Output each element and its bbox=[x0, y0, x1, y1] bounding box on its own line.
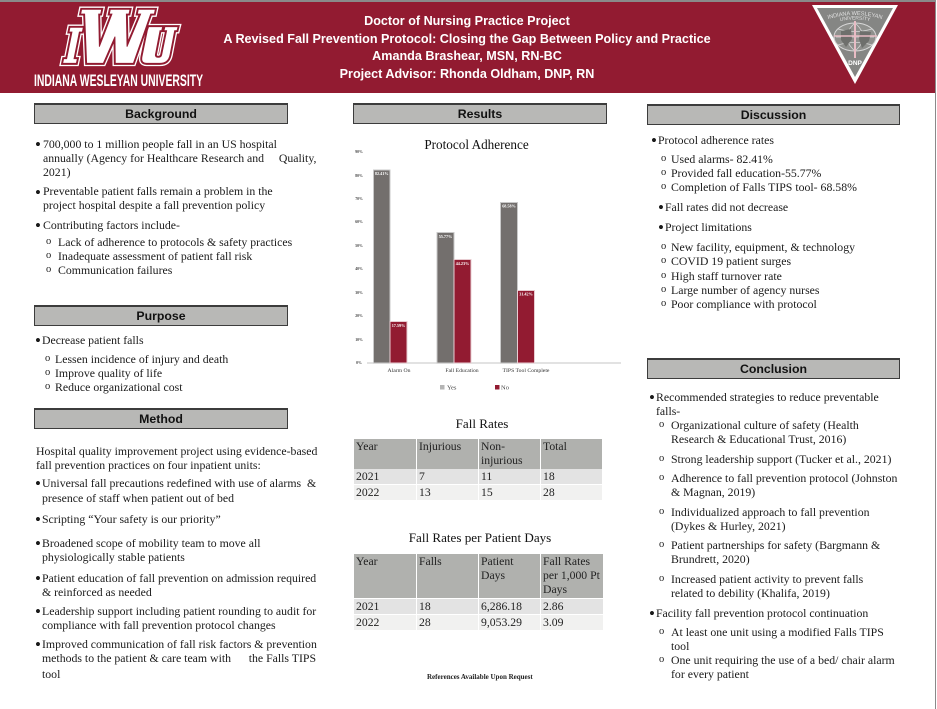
panel: discussion: Completion of Falls TIPS tool- 68.58% bbox=[671, 180, 857, 194]
panel: background: o bbox=[46, 264, 51, 275]
panel: conclusion: • bbox=[649, 604, 655, 623]
bar chart: protocol adherence: 82.41% bbox=[375, 171, 389, 176]
table: fall rates per patient days bbox=[354, 554, 603, 630]
table: fall rates: Total bbox=[543, 440, 567, 453]
panel: conclusion: (Dykes & Hurley, 2021) bbox=[671, 519, 786, 533]
heading: results: Results bbox=[458, 107, 502, 121]
heading: method bbox=[34, 408, 288, 429]
bar chart: protocol adherence bbox=[355, 137, 621, 392]
table: fall rates per patient days: Days bbox=[543, 583, 567, 596]
title: project heading: Project Advisor: Rhonda Oldham, DNP, RN bbox=[340, 67, 594, 81]
table: fall rates per patient days: 2021 bbox=[356, 600, 379, 613]
panel: discussion: • bbox=[658, 218, 664, 237]
heading: results bbox=[353, 103, 607, 124]
heading: conclusion: Conclusion bbox=[740, 362, 807, 376]
panel: discussion: Provided fall education-55.77% bbox=[671, 166, 821, 180]
panel: method: presence of staff when patient out of bed bbox=[42, 491, 234, 505]
bar chart: protocol adherence: 40% bbox=[355, 267, 363, 271]
bar chart: protocol adherence: 50% bbox=[355, 244, 363, 248]
bar chart: protocol adherence: 55.77% bbox=[439, 234, 452, 239]
panel: purpose: o bbox=[45, 367, 50, 378]
panel: discussion: Project limitations bbox=[665, 220, 752, 234]
panel: conclusion: & Magnan, 2019) bbox=[671, 485, 755, 499]
icon: DNP triangle seal bbox=[812, 5, 898, 84]
references note: References Available Upon Request bbox=[427, 673, 533, 681]
icon: IWU logo bbox=[34, 6, 203, 90]
heading: fall rates: Fall Rates bbox=[456, 416, 508, 431]
bar chart: protocol adherence: Yes bbox=[447, 384, 457, 392]
table: fall rates: Year bbox=[356, 440, 378, 453]
panel: method: tool bbox=[42, 667, 60, 681]
panel: discussion: High staff turnover rate bbox=[671, 269, 782, 283]
panel: conclusion: o bbox=[659, 573, 664, 584]
table: fall rates per patient days: Fall Rates bbox=[543, 555, 590, 568]
panel: discussion: Poor compliance with protocol bbox=[671, 297, 817, 311]
heading: purpose bbox=[34, 305, 288, 326]
panel: conclusion: • bbox=[649, 388, 655, 407]
panel: method: methods to the patient & care team with the Falls TIPS bbox=[42, 651, 316, 665]
panel: method: Hospital quality improvement project using evidence-based bbox=[36, 444, 317, 458]
panel: conclusion: Individualized approach to fall prevention bbox=[671, 505, 870, 519]
title: project heading: Doctor of Nursing Practice Project bbox=[364, 14, 570, 28]
panel: discussion bbox=[647, 104, 900, 311]
panel: background: Communication failures bbox=[58, 263, 172, 277]
bar chart: protocol adherence: TIPS Tool Complete bbox=[503, 368, 550, 374]
panel: conclusion: Increased patient activity to prevent falls bbox=[671, 572, 863, 586]
table: fall rates per patient days: 18 bbox=[419, 600, 431, 613]
panel: conclusion: One unit requiring the use of a bed/ chair alarm bbox=[671, 653, 895, 667]
bar chart: protocol adherence: Protocol Adherence bbox=[424, 137, 529, 152]
header banner bbox=[0, 0, 935, 93]
bar chart: protocol adherence: 60% bbox=[355, 220, 363, 224]
panel: background: project hospital despite a fall prevention policy bbox=[43, 198, 265, 212]
panel: conclusion: Research & Educational Trust, 2016) bbox=[671, 432, 846, 446]
panel: method: • bbox=[35, 474, 41, 493]
title: project heading: Amanda Brashear, MSN, RN-BC bbox=[372, 49, 562, 63]
table: fall rates: 2022 bbox=[356, 486, 379, 499]
panel: purpose: Lessen incidence of injury and death bbox=[55, 352, 228, 366]
panel: conclusion: Adherence to fall prevention protocol (Johnston bbox=[671, 471, 897, 485]
icon: DNP triangle seal: INDIANA WESLEYAN bbox=[828, 11, 882, 19]
bar chart: protocol adherence: Alarm On bbox=[388, 368, 411, 374]
panel: method: • bbox=[35, 534, 41, 553]
panel: conclusion: o bbox=[659, 472, 664, 483]
panel: conclusion: for every patient bbox=[671, 667, 749, 681]
panel: discussion: • bbox=[651, 131, 657, 150]
panel: background: o bbox=[46, 250, 51, 261]
panel: background: 2021) bbox=[43, 165, 71, 179]
panel: method: & reinforced as needed bbox=[42, 585, 152, 599]
bar chart: protocol adherence: 30% bbox=[355, 291, 363, 295]
heading: discussion: Discussion bbox=[741, 108, 806, 122]
panel: method: compliance with fall prevention protocol changes bbox=[42, 618, 276, 632]
panel: conclusion: o bbox=[659, 419, 664, 430]
panel: method: • bbox=[35, 569, 41, 588]
table: fall rates: 2021 bbox=[356, 470, 379, 483]
table: fall rates per patient days: 2022 bbox=[356, 616, 379, 629]
table: fall rates: Non- bbox=[481, 440, 505, 453]
panel: background: Contributing factors include- bbox=[43, 218, 180, 232]
panel: discussion: o bbox=[661, 153, 666, 164]
panel: discussion: Used alarms- 82.41% bbox=[671, 152, 773, 166]
panel: discussion: o bbox=[661, 181, 666, 192]
panel: purpose bbox=[34, 305, 288, 394]
icon: DNP triangle seal: DNP bbox=[848, 60, 863, 67]
panel: method: Leadership support including patient rounding to audit for bbox=[42, 604, 316, 618]
panel: method: Patient education of fall prevention on admission required bbox=[42, 571, 316, 585]
panel: conclusion: Patient partnerships for safety (Bargmann & bbox=[671, 538, 880, 552]
right page edge bbox=[935, 0, 936, 709]
heading: fall rates per patient days: Fall Rates per Patient Days bbox=[409, 530, 551, 545]
table: fall rates per patient days: Patient bbox=[481, 555, 513, 568]
panel: discussion: o bbox=[661, 255, 666, 266]
panel: discussion: Protocol adherence rates bbox=[658, 133, 774, 147]
panel: method: Improved communication of fall risk factors & prevention bbox=[42, 637, 317, 651]
panel: conclusion: related to debility (Khalifa, 2019) bbox=[671, 586, 830, 600]
panel: purpose: • bbox=[35, 331, 41, 350]
table: fall rates per patient days: 28 bbox=[419, 616, 431, 629]
panel: conclusion: Organizational culture of safety (Health bbox=[671, 418, 859, 432]
panel: conclusion: Recommended strategies to reduce preventable bbox=[656, 390, 879, 404]
panel: conclusion: falls- bbox=[656, 404, 680, 418]
bar chart: protocol adherence: 10% bbox=[355, 338, 363, 342]
panel: method: Scripting “Your safety is our priority” bbox=[42, 512, 221, 526]
panel: discussion: • bbox=[658, 198, 664, 217]
table: fall rates per patient days: Falls bbox=[419, 555, 442, 568]
panel: method: • bbox=[35, 602, 41, 621]
panel: purpose: Reduce organizational cost bbox=[55, 380, 183, 394]
panel: method: • bbox=[35, 510, 41, 529]
table: fall rates per patient days: Days bbox=[481, 569, 505, 582]
table: fall rates per patient days: 9,053.29 bbox=[481, 616, 522, 629]
heading: conclusion bbox=[647, 358, 900, 379]
panel: method: physiologically stable patients bbox=[42, 550, 185, 564]
table: fall rates per patient days: 2.86 bbox=[543, 600, 563, 613]
panel: conclusion bbox=[647, 358, 900, 681]
heading: method: Method bbox=[139, 412, 183, 426]
bar chart: protocol adherence: 20% bbox=[355, 314, 363, 318]
table: fall rates bbox=[354, 439, 602, 500]
panel: background bbox=[34, 103, 316, 277]
title: project heading bbox=[223, 14, 711, 81]
table: fall rates per patient days: Year bbox=[356, 555, 378, 568]
icon: DNP triangle seal: UNIVERSITY bbox=[840, 16, 870, 21]
bar chart: protocol adherence: Fall Education bbox=[445, 368, 479, 374]
heading: background: Background bbox=[125, 107, 197, 121]
table: fall rates: 7 bbox=[419, 470, 425, 483]
panel: background: annually (Agency for Healthcare Research and Quality, bbox=[43, 151, 316, 165]
panel: conclusion: o bbox=[659, 453, 664, 464]
bar chart: protocol adherence: No bbox=[501, 384, 509, 392]
table: fall rates: 13 bbox=[419, 486, 431, 499]
panel: background: • bbox=[35, 183, 41, 202]
panel: conclusion: o bbox=[659, 654, 664, 665]
bar chart: protocol adherence: 44.23% bbox=[456, 261, 469, 266]
panel: conclusion: Brundrett, 2020) bbox=[671, 552, 750, 566]
panel: background: Inadequate assessment of patient fall risk bbox=[58, 249, 252, 263]
panel: discussion: New facility, equipment, & technology bbox=[671, 240, 855, 254]
panel: background: • bbox=[35, 216, 41, 235]
panel: discussion: o bbox=[661, 167, 666, 178]
panel: background: • bbox=[35, 135, 41, 154]
bar chart: protocol adherence: 0% bbox=[356, 361, 362, 365]
panel: background: Lack of adherence to protocols & safety practices bbox=[58, 235, 292, 249]
table: fall rates per patient days: 6,286.18 bbox=[481, 600, 522, 613]
panel: purpose: o bbox=[45, 353, 50, 364]
panel: method bbox=[34, 408, 318, 681]
bar chart: protocol adherence: 70% bbox=[355, 197, 363, 201]
table: fall rates: 28 bbox=[543, 486, 555, 499]
panel: discussion: Large number of agency nurses bbox=[671, 283, 820, 297]
bar chart: protocol adherence: 17.59% bbox=[392, 323, 405, 328]
panel: discussion: COVID 19 patient surges bbox=[671, 254, 791, 268]
table: fall rates per patient days: per 1,000 Pt bbox=[543, 569, 600, 582]
panel: purpose: Decrease patient falls bbox=[42, 333, 144, 347]
panel: conclusion: Strong leadership support (Tucker et al., 2021) bbox=[671, 452, 891, 466]
panel: method: Universal fall precautions redefined with use of alarms & bbox=[42, 476, 316, 490]
table: fall rates: 11 bbox=[481, 470, 492, 483]
table: fall rates: Injurious bbox=[419, 440, 461, 453]
panel: purpose: Improve quality of life bbox=[55, 366, 162, 380]
title: project heading: A Revised Fall Prevention Protocol: Closing the Gap Between Policy and Practice bbox=[223, 32, 711, 46]
panel: conclusion: o bbox=[659, 506, 664, 517]
panel: method: • bbox=[35, 635, 41, 654]
table: fall rates: 15 bbox=[481, 486, 493, 499]
bar chart: protocol adherence: 68.58% bbox=[502, 204, 516, 208]
heading: discussion bbox=[647, 104, 900, 125]
panel: purpose: o bbox=[45, 381, 50, 392]
panel: conclusion: At least one unit using a modified Falls TIPS bbox=[671, 625, 884, 639]
panel: conclusion: o bbox=[659, 539, 664, 550]
panel: discussion: o bbox=[661, 284, 666, 295]
bar chart: protocol adherence: 31.42% bbox=[519, 292, 533, 296]
panel: conclusion: o bbox=[659, 626, 664, 637]
panel: background: Preventable patient falls remain a problem in the bbox=[43, 184, 273, 198]
panel: discussion: o bbox=[661, 270, 666, 281]
table: fall rates: injurious bbox=[481, 454, 523, 467]
heading: purpose: Purpose bbox=[136, 309, 186, 323]
table: fall rates: 18 bbox=[543, 470, 555, 483]
heading: background bbox=[34, 103, 288, 124]
panel: background: o bbox=[46, 236, 51, 247]
panel: discussion: o bbox=[661, 241, 666, 252]
panel: method: Broadened scope of mobility team to move all bbox=[42, 536, 261, 550]
bar chart: protocol adherence: 90% bbox=[355, 150, 363, 154]
table: fall rates per patient days: 3.09 bbox=[543, 616, 563, 629]
panel: background: 700,000 to 1 million people fall in an US hospital bbox=[43, 137, 277, 151]
bar chart: protocol adherence: 80% bbox=[355, 174, 363, 178]
panel: method: fall prevention practices on four inpatient units: bbox=[36, 458, 261, 472]
panel: discussion: o bbox=[661, 298, 666, 309]
panel: discussion: Fall rates did not decrease bbox=[665, 200, 788, 214]
panel: conclusion: tool bbox=[671, 639, 689, 653]
panel: conclusion: Facility fall prevention protocol continuation bbox=[656, 606, 868, 620]
